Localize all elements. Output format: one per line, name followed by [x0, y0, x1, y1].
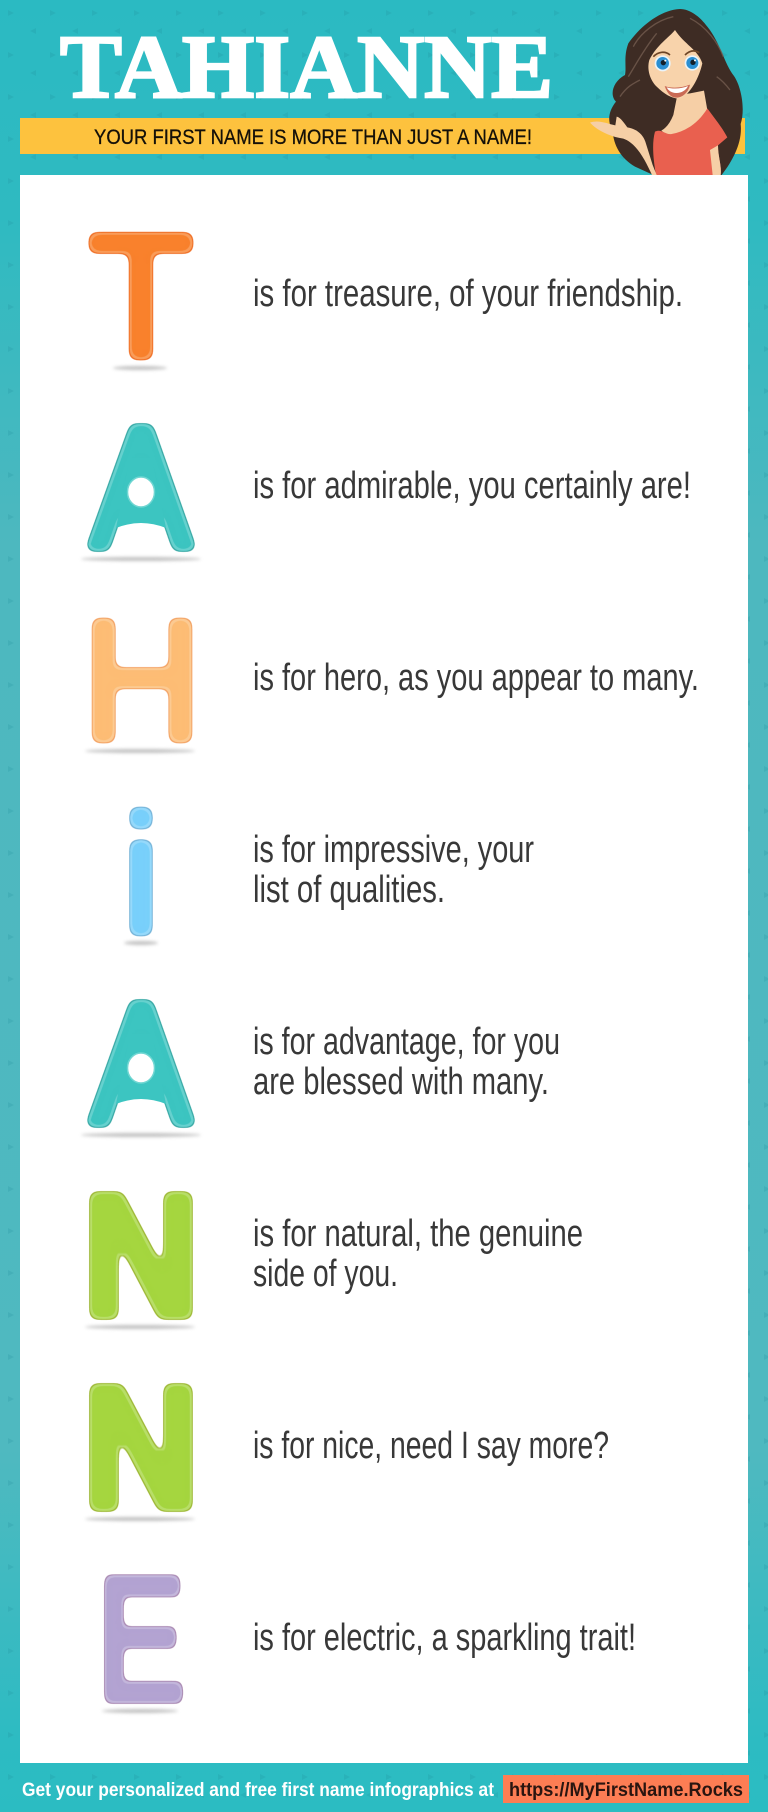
glossy green letter N: N: [83, 1160, 199, 1352]
glossy purple letter E: E: [97, 1541, 185, 1736]
glossy blue letter i: i: [122, 782, 160, 968]
shadow under letter E: [102, 1709, 178, 1713]
banner tagline: YOUR FIRST NAME IS MORE THAN JUST A NAME!: [94, 126, 532, 149]
sentence E: is for electric, a sparkling trait!: [253, 1617, 636, 1659]
row: N is for nice: [83, 1352, 609, 1544]
glossy peach letter H: H: [82, 586, 202, 776]
row: H is for hero: [82, 586, 699, 776]
sentence i: is for impressive, your: [253, 829, 534, 871]
glossy green letter N: N: [83, 1352, 199, 1544]
row: i is for impressive: [122, 782, 534, 968]
row: A is for admirable: [81, 392, 691, 582]
sentence i: list of qualities.: [253, 869, 445, 911]
shadow under letter i: [124, 941, 158, 945]
round counter of letter A: [116, 458, 166, 528]
shadow under second letter N: [85, 1517, 195, 1521]
row: E is for electric: [97, 1541, 636, 1736]
yellow banner: [20, 118, 745, 154]
character illustration: smiling woman: [590, 9, 743, 175]
shadow under letter H: [85, 749, 195, 753]
footer call to action: Get your personalized and free first name infographics at: [22, 1780, 495, 1801]
sentence A two: is for advantage, for you: [253, 1021, 560, 1063]
glossy orange letter T: T: [89, 198, 193, 393]
url text: https://MyFirstName.Rocks: [509, 1780, 743, 1801]
shadow under letter A: [81, 557, 201, 561]
row: T is for treasure: [89, 198, 683, 393]
row: N is for natural: [83, 1160, 583, 1352]
name title: TAHIANNE: [60, 18, 553, 117]
glossy teal letter A: A: [91, 392, 191, 582]
shadow under letter T: [113, 366, 167, 370]
footer url badge: [503, 1775, 749, 1803]
row: A is for advantage: [81, 968, 560, 1158]
round counter of second letter A: [116, 1034, 166, 1104]
sentence N two: is for nice, need I say more?: [253, 1425, 609, 1467]
shadow under letter N: [85, 1325, 195, 1329]
shadow under second letter A: [81, 1133, 201, 1137]
sentence A two: are blessed with many.: [253, 1061, 549, 1103]
glossy teal letter A: A: [91, 968, 191, 1158]
sentence N: side of you.: [253, 1253, 398, 1295]
sentence N: is for natural, the genuine: [253, 1213, 583, 1255]
